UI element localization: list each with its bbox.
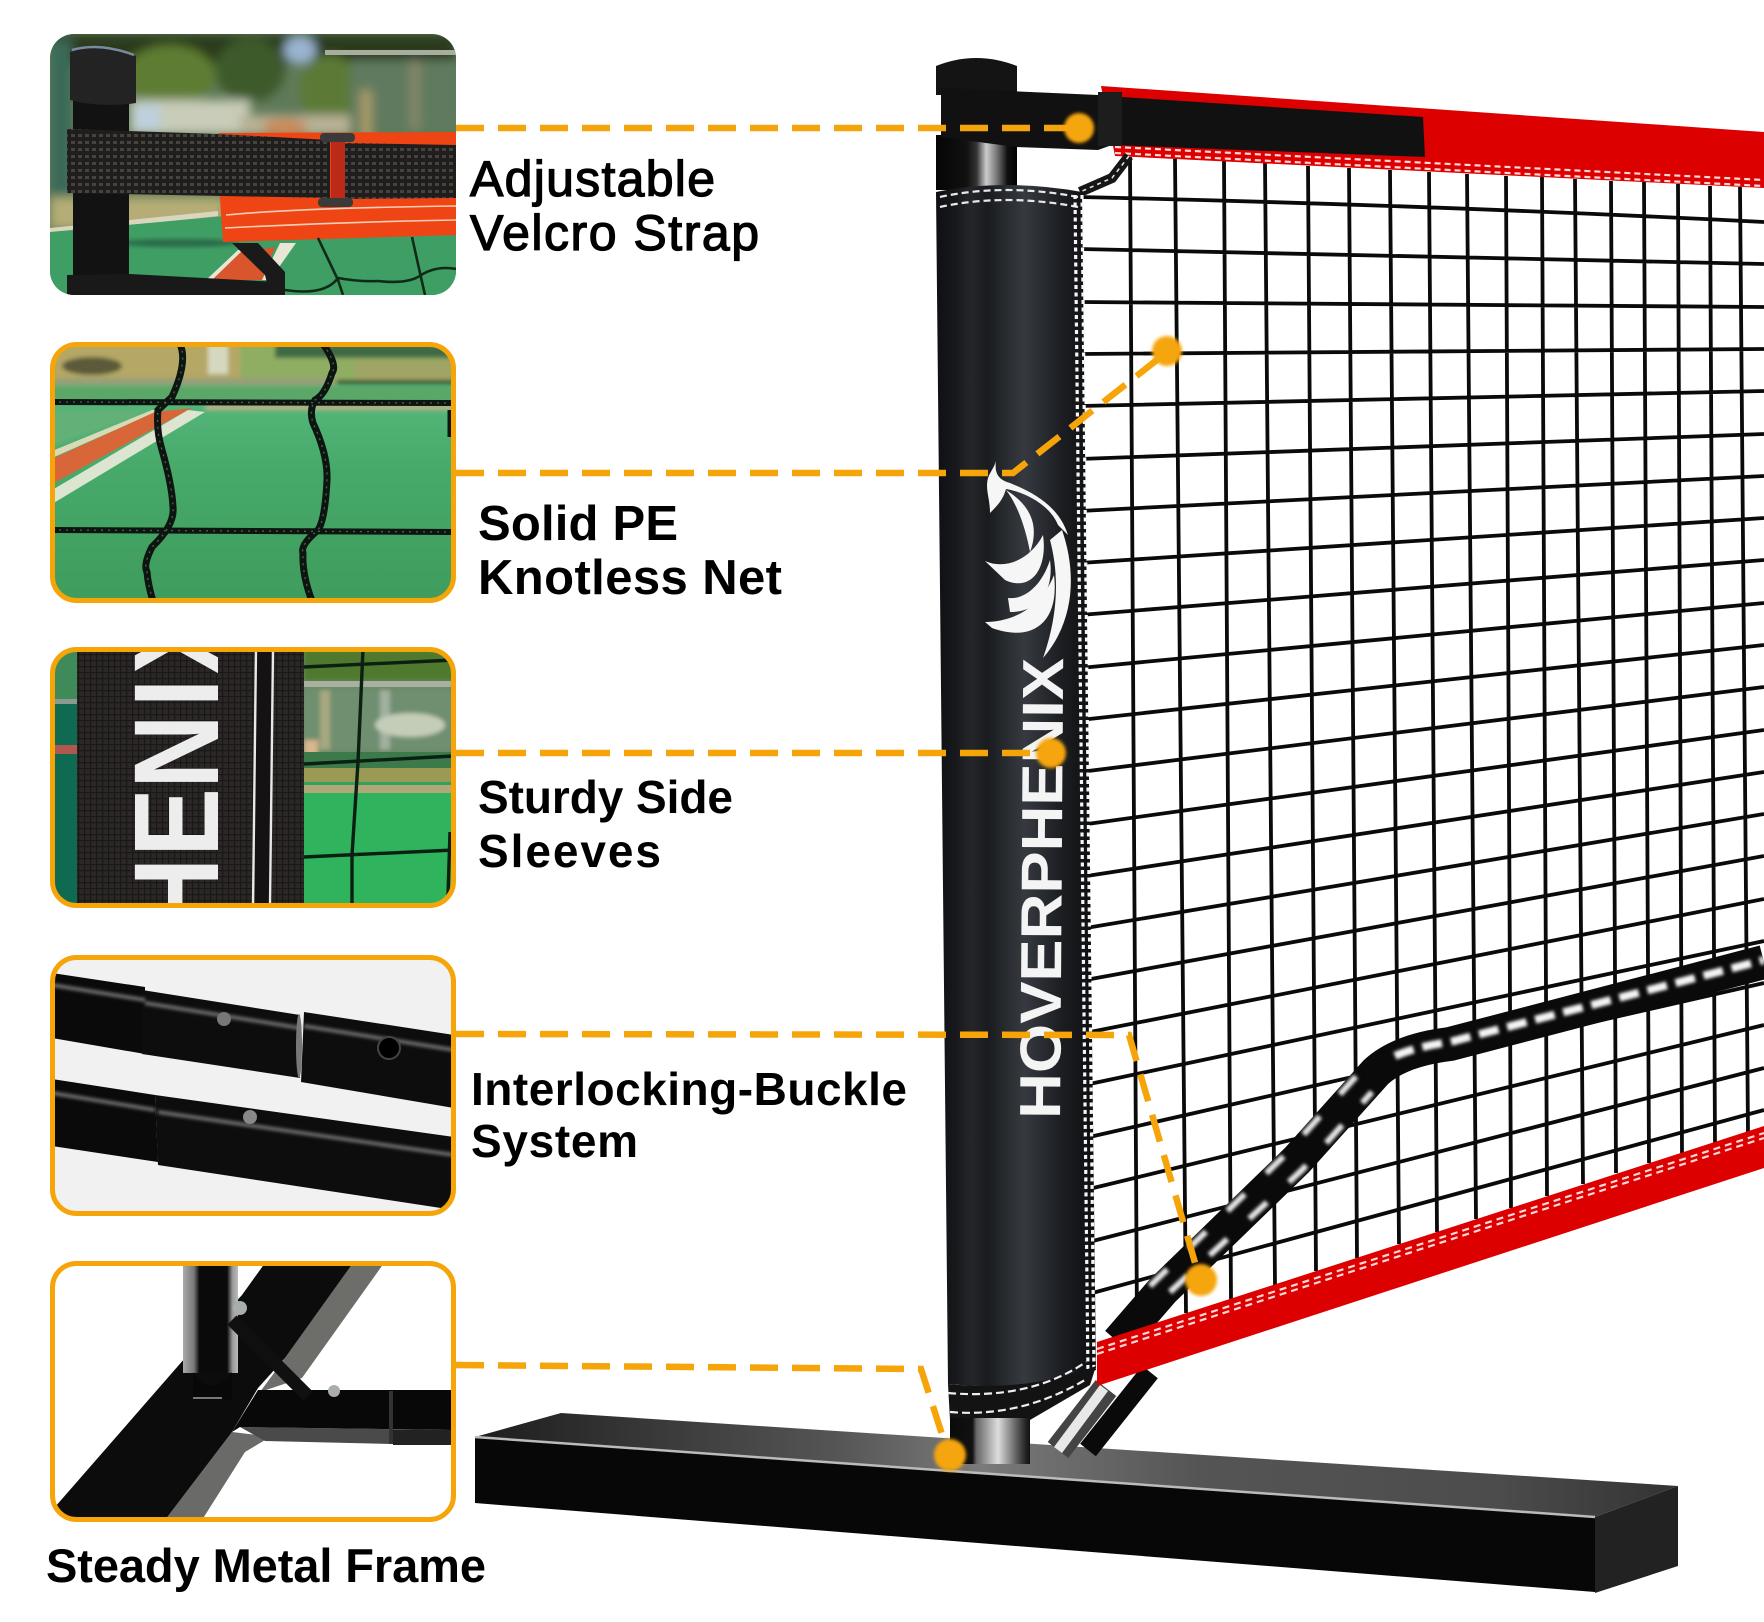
product: folded frame arm behind net (1118, 960, 1764, 1342)
label: interlocking buckle system (471, 1063, 907, 1167)
label: interlocking buckle system: System (471, 1115, 638, 1167)
product: lower support tubes (1058, 1372, 1150, 1450)
product: corner cord (1080, 156, 1129, 192)
product: phoenix logo (985, 461, 1071, 658)
label: adjustable velcro strap: Velcro Strap (470, 205, 759, 261)
net cords (304, 649, 454, 906)
panel: adjustable velcro strap photo (50, 34, 456, 295)
product: velcro strap wrap (941, 88, 1425, 157)
orange net band (218, 132, 456, 242)
label: sturdy side sleeves (478, 771, 733, 877)
label: adjustable velcro strap: Adjustable (470, 151, 715, 207)
product: sleeve collar and pole foot (948, 1362, 1096, 1464)
product: side sleeve (936, 185, 1096, 1386)
callout: buckle system leader (456, 1034, 1217, 1296)
net cords (52, 344, 454, 601)
product: lower red band (1097, 1126, 1764, 1386)
product: sleeve brand text: HOVERPHENIX (1008, 657, 1076, 1119)
product: top red band (1101, 86, 1764, 188)
panel: interlocking buckle system photo (52, 957, 454, 1214)
brace (232, 1320, 308, 1396)
label: interlocking buckle system: Interlocking-Buckle (471, 1063, 907, 1115)
label: sturdy side sleeves: Sleeves (478, 825, 661, 877)
sleeve logo text: HENIX (108, 605, 244, 932)
label: steady metal frame: Steady Metal Frame (46, 1539, 486, 1592)
lower tube (52, 1079, 454, 1210)
callout: velcro strap leader (456, 113, 1094, 143)
black webbing strap (67, 129, 456, 199)
product: pole top and cap (936, 58, 1017, 190)
vertical pole (183, 1263, 238, 1400)
label: sturdy side sleeves: Sturdy Side (478, 771, 733, 823)
bolts (233, 1301, 340, 1397)
product: net mesh (1080, 157, 1764, 1329)
pole in photo (70, 47, 136, 295)
buckle (318, 133, 355, 207)
label: solid PE knotless net (478, 497, 782, 605)
product: weighted base (475, 1413, 1678, 1593)
label: solid PE knotless net: Knotless Net (478, 551, 782, 605)
callout: net leader (456, 336, 1182, 473)
callout: side sleeve leader (456, 738, 1066, 768)
callout: metal frame leader (456, 1365, 966, 1471)
upper tube (52, 973, 454, 1108)
label: adjustable velcro strap (470, 151, 759, 261)
panel: solid PE knotless net photo (52, 344, 455, 601)
black sleeve (77, 649, 304, 906)
label: solid PE knotless net: Solid PE (478, 497, 678, 551)
panel: steady metal frame photo (52, 1263, 454, 1520)
base beam (52, 1263, 384, 1520)
panel: sturdy side sleeves photo (55, 652, 451, 903)
horizontal tube (232, 1390, 453, 1445)
